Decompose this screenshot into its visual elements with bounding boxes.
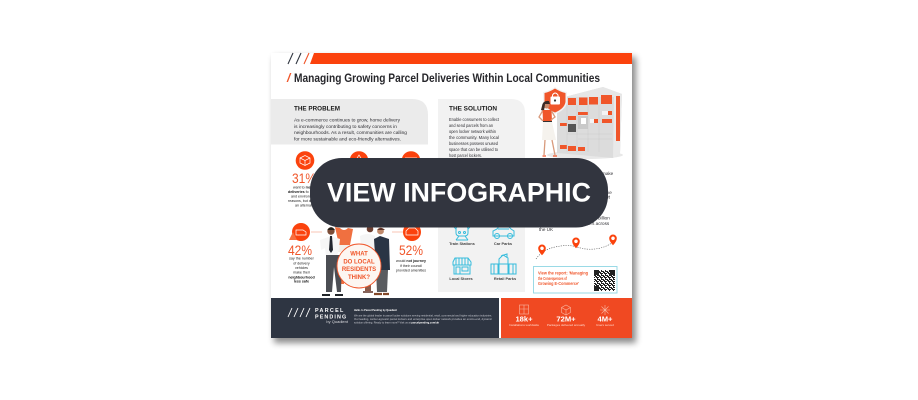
- problem heading: THE PROBLEM: [294, 106, 340, 113]
- title: Managing Growing Parcel Deliveries Within Local Communities: [294, 71, 600, 85]
- stat: installations: 18k+: [515, 315, 533, 324]
- problem text: As e-commerce continues to grow, home delivery: [294, 118, 401, 123]
- stat: 52%: provided amenities: [396, 268, 426, 272]
- solution text: the community. Many local: [449, 135, 499, 140]
- stat: packages: Packages delivered annually: [547, 323, 586, 327]
- solution text: open locker network within: [449, 129, 496, 134]
- person: man right: [374, 228, 390, 294]
- stat: 31%: want to mo: [293, 186, 312, 190]
- icon: car: [493, 225, 514, 238]
- icon: van warning: [289, 223, 310, 241]
- logo: PARCEL: [315, 308, 345, 314]
- stat: 52%: [396, 223, 426, 272]
- QR code: [594, 270, 615, 291]
- stat: installations: [509, 305, 539, 327]
- right column text: the UK: [539, 227, 554, 232]
- middle panels: [568, 116, 576, 120]
- stat: users: Users served: [596, 323, 614, 327]
- button: view infographic: VIEW INFOGRAPHIC: [327, 178, 591, 208]
- right column text: billion: [598, 216, 610, 221]
- logo: by Quadient: [326, 319, 349, 324]
- button: view infographic: [310, 158, 608, 228]
- solution text: [449, 117, 500, 158]
- illustration: residents group: [320, 226, 390, 295]
- title: /: [286, 71, 292, 85]
- stat: 31%: [288, 151, 316, 208]
- label: Local Stores: [449, 276, 473, 281]
- stat: 31%: an alternativ: [295, 204, 315, 208]
- about text: We are the global leader in parcel locker solutions serving residential, retail, commercial and higher education industries.: [354, 314, 492, 318]
- illustration: woman: [539, 101, 557, 156]
- solution text: host parcel lockers.: [449, 153, 482, 158]
- label: Retail Parks: [494, 276, 516, 281]
- stat: 31%: and environm: [291, 194, 313, 198]
- top banner: [288, 53, 632, 64]
- icon: pin: [572, 238, 580, 248]
- icon: train: [453, 226, 471, 240]
- about text: Our leading, carrier-agnostic parcel lockers and enterprise open locker network provides an end-to-end, dynamic: [354, 317, 493, 321]
- callout: what do local residents think: RESIDENTS: [342, 267, 376, 273]
- stat: 42%: make their: [293, 270, 311, 274]
- icon: delivery: [402, 151, 420, 170]
- callout: report link with QR code: Growing E-Commerce': [538, 281, 579, 286]
- bottom row doors: [560, 145, 567, 149]
- footer: stats panel: [501, 298, 632, 338]
- stat: 42%: 42%: [288, 243, 312, 258]
- right column text: make: [602, 171, 614, 176]
- stat: 42%: of delivery: [293, 261, 310, 265]
- icon: car journey: [403, 223, 421, 241]
- icon: retail park: [491, 254, 516, 274]
- stat: 42%: [288, 223, 315, 284]
- callout: what do local residents think: WHAT: [350, 252, 368, 258]
- solution text: space that can be utilised to: [449, 147, 498, 152]
- solution text: Enable consumers to collect: [449, 117, 500, 122]
- label: Car Parks: [494, 241, 512, 246]
- infographic sheet: [271, 53, 632, 338]
- stat: 31%: deliveries fo: [288, 190, 309, 194]
- stat: 52%: 52%: [399, 243, 423, 258]
- person: woman in orange: [335, 227, 353, 284]
- logo: [288, 308, 349, 324]
- stat: 42%: neighbourhood: [288, 275, 315, 279]
- about text: Hello. Is Parcel Pending by Quadient: [354, 308, 397, 312]
- callout: what do local residents think: DO LOCAL: [343, 259, 375, 265]
- callout: report link with QR code: [534, 266, 617, 293]
- right column text: [539, 171, 614, 232]
- icon: parcel: [296, 151, 314, 170]
- solution text: and send parcels from an: [449, 123, 493, 128]
- icon: local store: [453, 258, 471, 274]
- about text: solution offering. Ready to learn more? Visit us at parcelpending.com/uk: [354, 320, 439, 324]
- connector lines: [311, 231, 403, 233]
- top row doors: [568, 98, 576, 105]
- right column text: ent: [603, 194, 610, 200]
- stat: packages: 72M+: [556, 315, 576, 324]
- problem text: for more sustainable and eco-friendly alternatives.: [294, 136, 401, 142]
- callout: report link with QR code: View the report: 'Managing: [538, 271, 588, 276]
- solution heading: THE SOLUTION: [449, 106, 497, 112]
- stat: 42%: say the number: [289, 256, 315, 260]
- callout: what do local residents think: THINK?: [348, 275, 370, 281]
- stat: users: 4M+: [598, 315, 613, 324]
- panel: the problem: [271, 99, 428, 144]
- stat: packages: [547, 305, 586, 327]
- problem text: neighbourhoods. As a result, communities are calling: [294, 130, 407, 135]
- person: woman in white: [360, 226, 376, 292]
- locker location icons: [449, 225, 516, 281]
- icon: pin: [609, 234, 617, 245]
- stat: users: [596, 305, 614, 327]
- illustration: parcel lockers: [547, 87, 623, 159]
- person: man left: [320, 227, 343, 295]
- stat: 31%: 31%: [292, 171, 316, 186]
- route map with pins: [536, 234, 617, 259]
- callout: what do local residents think: [337, 244, 381, 288]
- stat: 52%: would not journey: [396, 259, 426, 263]
- solution text: businesses possess unused: [449, 141, 498, 146]
- problem text: [294, 118, 407, 142]
- stat: installations: Installations worldwide: [509, 323, 539, 327]
- callout: report link with QR code: the Consequences of: [538, 276, 567, 281]
- icon: security shield: [543, 87, 567, 114]
- logo: PENDING: [315, 315, 347, 321]
- document shadow: [274, 57, 636, 343]
- right column text: ers across: [588, 221, 610, 226]
- stat: 42%: less safe: [294, 280, 309, 284]
- problem text: is increasingly contributing to safety concerns in: [294, 124, 397, 129]
- label: Train Stations: [449, 241, 475, 246]
- panel: the solution: [438, 99, 525, 292]
- about text: [354, 308, 493, 324]
- icon: community: [350, 151, 368, 170]
- stat: 52%: if their council: [400, 264, 422, 268]
- stat: 31%: reasons, but de: [288, 199, 313, 203]
- icon: pin: [538, 244, 546, 255]
- footer: about panel: [271, 298, 499, 338]
- stat: 42%: vehicles: [295, 266, 308, 270]
- right column text: ke: [607, 190, 612, 195]
